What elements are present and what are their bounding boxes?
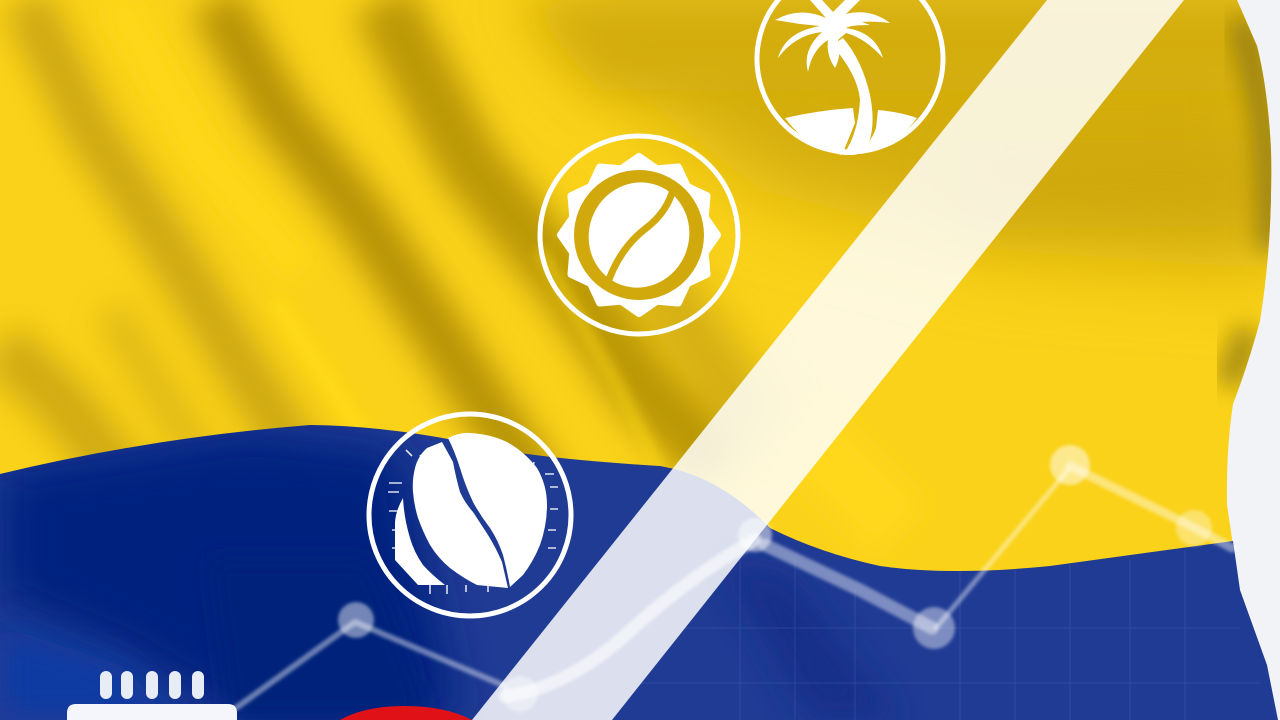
icon: white base with five pins: [67, 671, 237, 720]
bean ticks: [388, 450, 558, 594]
line chart overlay: [236, 445, 1232, 708]
palm fronds: [775, 0, 890, 72]
fold shadows: [25, 0, 320, 490]
raw bean: [395, 433, 547, 588]
icon: palm tree badge: [757, 0, 943, 155]
icon: coffee bean seal badge: [540, 136, 738, 334]
chart line over the band: [502, 518, 772, 712]
palm island: [785, 108, 917, 155]
flag: blue stripe: [0, 420, 1280, 720]
diagonal translucent band: [472, 0, 1184, 720]
faint grid lines: [640, 550, 1260, 720]
coffee bean: [574, 168, 704, 302]
palm trunk: [832, 38, 873, 155]
icon: red dome: [340, 706, 472, 720]
icon: raw coffee bean badge: [369, 414, 571, 616]
fold highlights: [275, 300, 400, 490]
seal: [561, 157, 717, 313]
